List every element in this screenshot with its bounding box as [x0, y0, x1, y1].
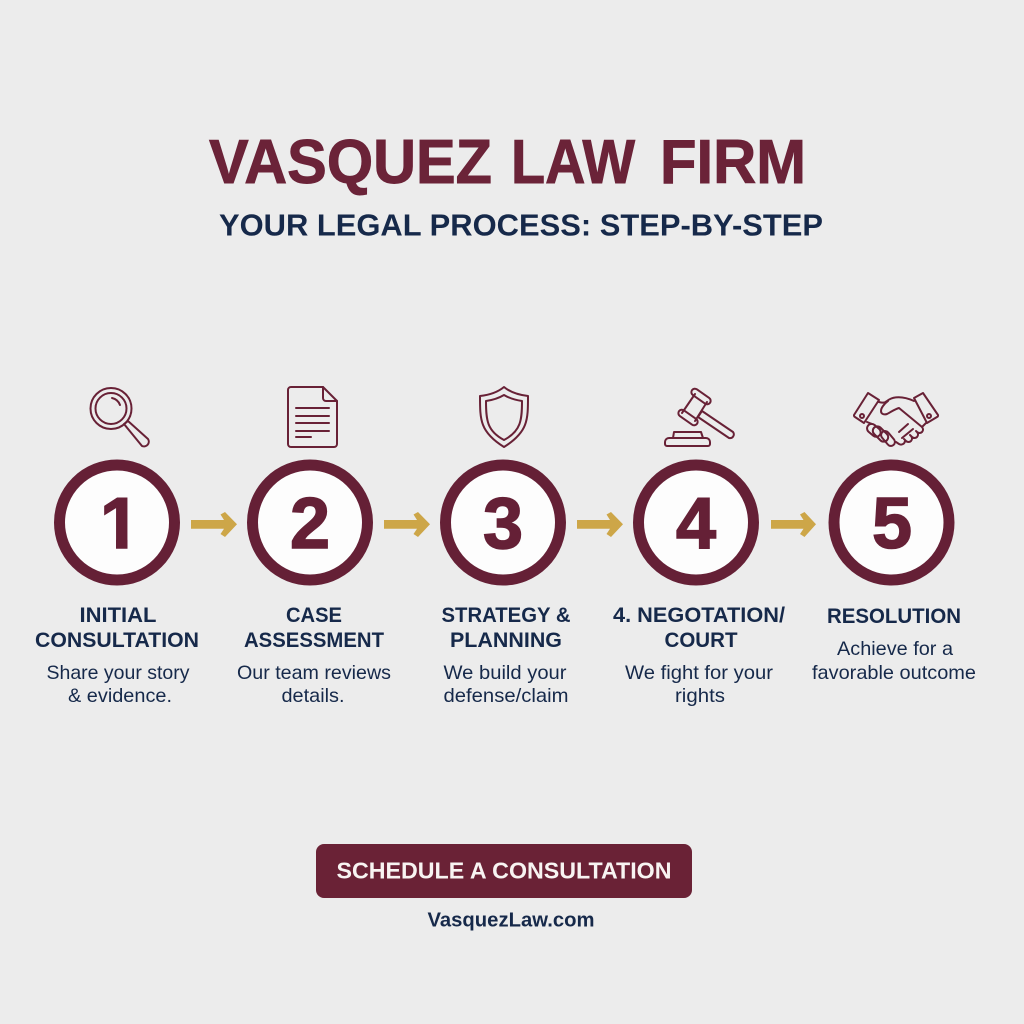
arrow 2 to 3	[384, 512, 430, 537]
step 2 text: Our team reviews	[237, 662, 391, 684]
step 5 text: favorable outcome	[812, 662, 976, 684]
step 5 circle	[834, 465, 949, 580]
arrow 1 to 2	[191, 512, 237, 537]
step 3 text: PLANNING	[450, 629, 562, 652]
step 5 text: RESOLUTION	[827, 605, 961, 628]
step 2 text: ASSESSMENT	[244, 629, 384, 652]
step 2 text	[237, 604, 391, 707]
step 4 circle: 4	[676, 484, 716, 564]
step 1 circle: 1	[100, 484, 140, 564]
step 3 circle	[446, 465, 560, 580]
subtitle: YOUR LEGAL PROCESS: STEP-BY-STEP	[219, 208, 823, 242]
step 4 text	[613, 604, 785, 707]
step 2 text: details.	[282, 685, 344, 707]
icon: magnifying glass	[90, 388, 149, 446]
step 3 text: defense/claim	[444, 685, 568, 707]
step 1 text: INITIAL	[80, 604, 157, 627]
icon: document	[288, 387, 337, 447]
icon: gavel	[665, 387, 734, 446]
step 2 circle: 2	[290, 484, 330, 564]
step 1 text	[35, 604, 199, 707]
step 3 circle: 3	[483, 484, 523, 564]
step 1 text: Share your story	[46, 662, 190, 684]
icon: handshake	[854, 393, 938, 448]
call to action button	[316, 844, 692, 898]
website: VasquezLaw.com	[428, 910, 594, 932]
step 4 circle	[638, 465, 754, 580]
call to action button: SCHEDULE A CONSULTATION	[336, 858, 672, 884]
step 4 text: 4. NEGOTATION/	[613, 604, 785, 627]
step 1 text: & evidence.	[68, 685, 172, 707]
icon: shield	[480, 387, 528, 447]
step 2 text: CASE	[286, 604, 342, 627]
step 4 text: rights	[675, 685, 725, 707]
step 3 text: STRATEGY &	[442, 604, 570, 627]
arrow 3 to 4	[577, 512, 623, 537]
step 4 text: We fight for your	[625, 662, 774, 684]
title	[209, 128, 806, 197]
title: LAW	[511, 128, 635, 197]
title: VASQUEZ	[209, 128, 492, 197]
step 5 circle: 5	[872, 484, 912, 564]
step 5 text: Achieve for a	[837, 638, 953, 660]
arrow 4 to 5	[771, 512, 816, 537]
step 5 text	[812, 605, 976, 684]
step 3 text	[442, 604, 570, 707]
step 4 text: COURT	[664, 629, 738, 652]
step 1 circle	[60, 465, 174, 580]
title: FIRM	[660, 128, 806, 197]
step 3 text: We build your	[444, 662, 567, 684]
step 1 text: CONSULTATION	[35, 629, 199, 652]
step 2 circle	[252, 465, 368, 580]
